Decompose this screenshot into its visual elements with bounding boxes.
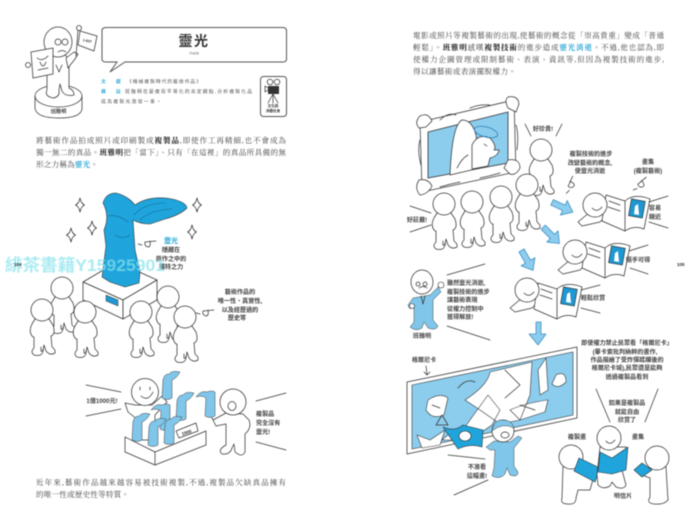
plinth: [83, 262, 157, 319]
group: people with reproductions: 複製畫: [568, 433, 586, 441]
callout: replicas lack aura: [256, 393, 286, 450]
label: Guernica: 格爾尼卡: [412, 356, 436, 364]
paragraph: intro: [36, 135, 286, 169]
callout: aura: 靈光: [164, 236, 178, 245]
speech bubble: title: Aura: [189, 50, 199, 56]
watermark: 緋茶書籍Y15925901: [5, 255, 165, 275]
paragraph: intro: 將藝術作品拍成照片或印刷製成複製品,即使作工再精細,也不會成為: [36, 135, 286, 145]
callout: technology: [564, 150, 612, 195]
text block: reference notes: 文: [101, 78, 106, 85]
person with art book: [597, 426, 628, 488]
arrow: [515, 246, 540, 274]
figure: Benjamin: 班雅明: [413, 332, 431, 340]
callout: Benjamin quote: 獲得解放!: [447, 313, 473, 321]
paragraph: film and photography: 得以讓藝術或表演擺脫權力。: [413, 66, 516, 76]
right page: [407, 30, 685, 504]
paragraph: replicas: 的唯一性或歷史性等特質。: [36, 489, 129, 499]
figure: Benjamin: [408, 270, 444, 340]
label: at hand: [626, 245, 650, 274]
callout: Guernica explanation: (畢卡索批判納粹的畫作,: [593, 348, 658, 356]
text block: reference notes: 備: [101, 88, 106, 95]
paragraph: intro: 獨一無二的真品。班雅明把「當下」、只有「在這裡」的真品所具備的無: [36, 147, 286, 157]
person with postcard: [634, 446, 669, 504]
arrow: [538, 222, 565, 249]
callout: aura: 獨特之力: [159, 263, 183, 271]
group: people with reproductions: [559, 426, 669, 504]
callout: authenticity: 藝術作品的: [225, 288, 255, 296]
callout: free appreciation: 欣賞了: [618, 416, 636, 424]
exclamation: solemn: 好莊嚴!: [407, 216, 427, 224]
paragraph: replicas: 近年來,藝術作品越來越容易被技術複製,不過,複製品欠缺真品擁有: [36, 477, 286, 487]
callout: free appreciation: [596, 389, 658, 424]
icon: film camera badge: 文化與: [268, 103, 279, 108]
text block: reference notes: [101, 78, 252, 105]
buyer: [211, 389, 250, 455]
callout: aura: 隱藏在: [162, 246, 180, 254]
callout: aura: [138, 236, 186, 271]
paragraph: film and photography: 電影或照片等複製藝術的出現,使藝術的概念從「崇高貴重」變成「普通: [413, 30, 664, 40]
callout: art book: [631, 158, 662, 192]
text block: reference notes: 班雅明在是複寫平等化的肯定觀點,分析複製化品: [125, 88, 252, 95]
text block: reference notes: 成為複製光激發一事。: [101, 98, 161, 105]
icon: Benjamin statue figurine: [26, 26, 97, 118]
illustration: winged statue on plinth with viewers: [30, 193, 201, 362]
page number 105: 105: [677, 262, 685, 267]
paragraph: intro: 形之力稱為靈光。: [36, 159, 98, 169]
group: people with reproductions: 明信片: [614, 492, 632, 500]
callout: technology: 改變藝術的概念,: [568, 159, 612, 167]
person with reproduction: [559, 445, 600, 504]
callout: replicas lack aura: 複製品: [256, 410, 274, 418]
icon: Benjamin statue figurine: 班雅明: [51, 107, 66, 115]
statue: blue winged victory: [102, 193, 187, 287]
replica box: 1000: [181, 428, 193, 436]
label: casual appreciation: [581, 285, 605, 313]
callout: Benjamin quote: [447, 264, 490, 340]
reader 2: [558, 240, 630, 278]
seller: [125, 378, 167, 440]
page number 104: 104: [14, 262, 22, 267]
label: easy to approach: 容易: [649, 204, 661, 212]
label: easy to approach: 親近: [649, 213, 661, 221]
viewers: [30, 277, 198, 362]
left page: [5, 26, 286, 499]
icon: film camera badge: [260, 76, 286, 116]
exclamation: forbidden: [448, 455, 488, 495]
speech bubble: title: 靈光: [178, 33, 210, 49]
arrow: down: [529, 322, 546, 345]
painting: framed Madonna: [417, 97, 520, 195]
callout: price exclamation: [86, 385, 121, 416]
painting: Guernica: [407, 347, 577, 454]
paragraph: film and photography: 使權力企圖管理或限制藝術、表演、資訊等,但因為複製技術的進步,: [413, 54, 664, 64]
group: people with reproductions: 畫集: [632, 433, 644, 441]
callout: art book: (複製藝術): [634, 167, 662, 175]
callout: Benjamin quote: 讓藝術表現: [447, 296, 477, 304]
exclamation: wow: 好珍貴!: [533, 125, 553, 133]
callout: art book: 畫集: [642, 158, 654, 166]
icon: film camera badge: 消費社會: [266, 108, 281, 113]
icon: Benjamin statue figurine: 1-937: [82, 38, 92, 44]
viewers: queue at painting: [432, 139, 554, 250]
replica held by buyer: [196, 391, 215, 418]
callout: Benjamin quote: 雖然靈光消逝,: [447, 279, 486, 287]
exclamation: forbidden: 不准看: [468, 463, 486, 471]
label: casual appreciation: 輕鬆欣賞: [581, 294, 605, 302]
callout: Guernica explanation: 透過複製品看到: [606, 373, 648, 381]
text block: reference notes: 《機械複製時代的藝術作品》: [127, 78, 201, 85]
reader 1: [578, 193, 650, 231]
label: easy to approach: [649, 196, 668, 228]
callout: Guernica explanation: 即使權力禁止民眾看「格爾尼卡」: [581, 339, 673, 347]
label: at hand: 隨手可得: [626, 256, 650, 264]
paragraph: film and photography: 輕鬆」。班雅明感嘆複製技術的進步造成靈光消逝。不過,他也認為,即: [413, 42, 664, 52]
arrow: [549, 195, 576, 219]
exclamation: forbidden: 這幅畫!: [467, 472, 487, 480]
paragraph: film and photography: [413, 30, 664, 76]
callout: replicas lack aura: 靈光!: [256, 428, 270, 436]
callout: authenticity: [196, 288, 262, 322]
callout: Guernica explanation: 作品描繪了受炸彈蹂躪後的: [590, 356, 664, 364]
paragraph: replicas: [36, 477, 286, 499]
speech bubble: title: [102, 28, 286, 72]
callout: price exclamation: 1億1000元!: [86, 397, 118, 405]
callout: technology: 使靈光消逝: [575, 167, 605, 175]
callout: Guernica explanation: 格爾尼卡城),民眾還是能夠: [592, 364, 662, 372]
callout: aura: 原作之中的: [156, 255, 186, 263]
replica held by seller: [162, 371, 180, 400]
callout: authenticity: 以及經歷過的: [222, 306, 258, 314]
icon: sparkles: [66, 198, 202, 242]
text block: reference notes: 註: [116, 88, 121, 95]
exclamation: wow: [525, 124, 562, 136]
callout: technology: 複製技術的進步: [570, 150, 612, 158]
callout: free appreciation: 如果是複製品: [609, 399, 645, 407]
exclamation: solemn: [407, 206, 431, 232]
illustration: replica stall: [125, 371, 250, 465]
callout: replicas lack aura: 完全沒有: [256, 419, 280, 427]
callout: authenticity: 唯一性、真實性,: [218, 297, 262, 305]
figure: censor with flag: [443, 420, 522, 478]
callout: free appreciation: 就能自由: [615, 408, 639, 416]
callout: authenticity: 歷史等: [228, 314, 246, 322]
callout: Guernica explanation: [581, 339, 673, 381]
reader 3: [510, 278, 582, 319]
callout: Benjamin quote: 從權力控制中: [447, 305, 484, 313]
callout: Benjamin quote: 複製技術的進步: [447, 288, 490, 296]
label: Guernica: [412, 356, 436, 375]
text block: reference notes: 獻: [116, 78, 121, 85]
